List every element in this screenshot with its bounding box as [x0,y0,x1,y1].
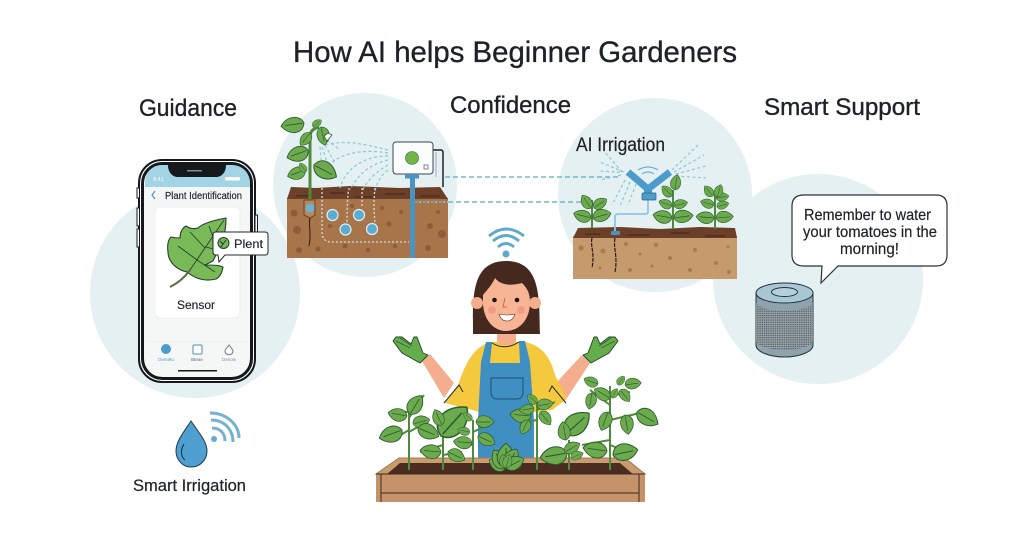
soil moisture sensors [327,210,378,235]
raised planter back and soil [376,458,645,475]
icon: water drop with wifi [176,413,239,467]
heading: smart support: Smart Support [764,94,920,121]
gardener [393,261,618,462]
arms [422,354,454,398]
plant five [539,405,595,467]
plant six [582,374,662,463]
soil cross section with sensors and controller [280,116,448,258]
tomato and bean plants [377,374,662,474]
seedlings [572,174,734,229]
status bar time: 9:41 [153,177,164,183]
hose [615,200,648,232]
plant three [453,411,498,450]
apron [478,341,534,462]
roots [592,238,616,272]
speech bubble [792,195,947,283]
soil [573,236,737,279]
neck [497,328,516,346]
background circle: smart support [713,174,923,384]
app screen title: Plant Identification [165,191,242,202]
plant label bubble [213,232,268,262]
shirt [445,342,567,412]
speech bubble: morning! [840,241,899,258]
heading: guidance: Guidance [139,95,237,122]
phone with plant identification app [137,160,268,382]
heading: confidence: Confidence [450,92,571,119]
background circle: confidence [273,93,457,277]
connecting dashed data lines [415,177,618,202]
label: AI irrigation: AI Irrigation [576,135,665,156]
icon: leaf [168,218,226,287]
AI irrigation soil section with sprinkler [572,145,737,279]
icon: wifi above gardener [489,229,524,258]
card label: Sensor [177,298,215,312]
left glove [393,337,428,363]
lettuce [486,443,527,474]
sensor wiring [322,188,448,242]
soil [287,198,448,258]
background circle: irrigation [558,98,752,292]
tab bar: Bteae [191,357,203,362]
water spray [598,145,706,206]
label: smart irrigation: Smart Irrigation [133,476,246,495]
tab bar [146,341,248,362]
tab bar: Demetu [158,357,174,362]
speech bubble: Remember to water [804,207,932,224]
right glove [583,337,618,363]
speech bubble: your tomatoes in the [803,224,937,241]
water spray [320,140,388,192]
plant label bubble: Plent [234,237,264,251]
plant one [377,392,442,446]
identification card [155,207,240,318]
controller device [393,142,443,258]
plant with root sensor [280,116,341,246]
background circle: guidance [90,188,300,398]
soil speckles [578,242,731,274]
tab bar: Denow [222,357,237,362]
raised planter front [376,474,645,502]
plant four [509,392,555,436]
hair [473,261,540,334]
title: How AI helps Beginner Gardeners [293,36,737,69]
plant two [419,398,476,465]
smart speaker [756,283,813,357]
Y sprinkler head [628,167,670,200]
soil speckles [290,204,446,253]
back arrow [152,191,155,199]
face [471,278,541,331]
